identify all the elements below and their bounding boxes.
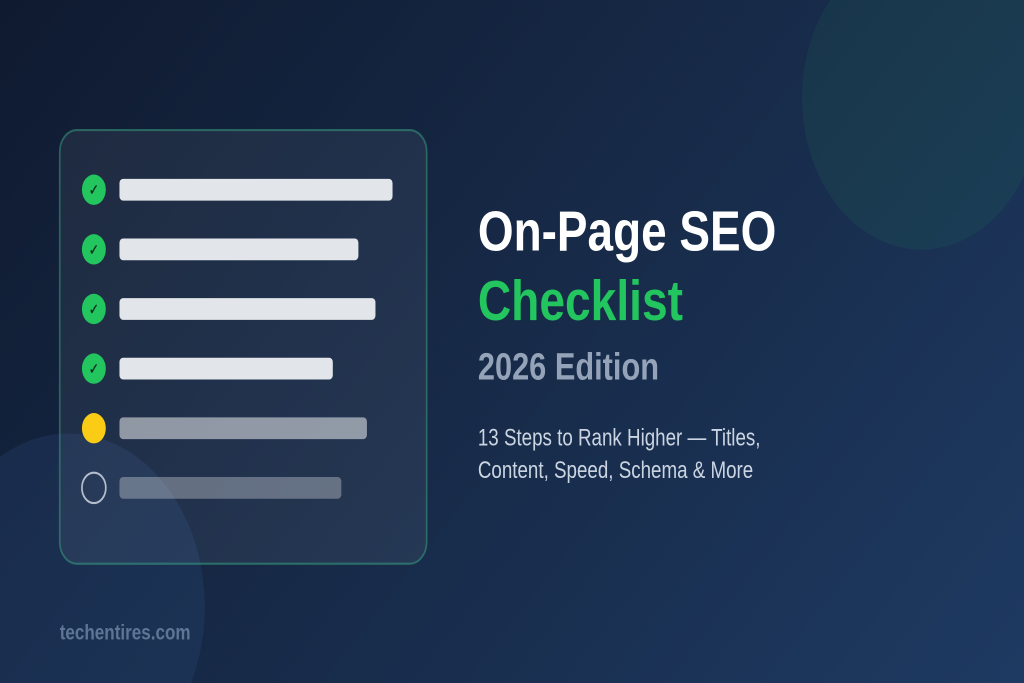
checklist item 1: done	[82, 175, 393, 205]
title: Checklist: Checklist	[478, 268, 683, 332]
checklist item 4: done: ✓	[89, 361, 99, 378]
panel: checklist card	[60, 130, 427, 564]
checklist item 1: done: ✓	[89, 182, 99, 200]
description	[478, 424, 761, 484]
checklist item 4: done	[82, 353, 333, 384]
description: 13 Steps to Rank Higher — Titles,	[478, 424, 761, 451]
checklist item 5: in progress	[82, 413, 367, 443]
checklist item 3: done	[82, 294, 375, 324]
checklist item 2: done	[82, 234, 358, 265]
description: Content, Speed, Schema & More	[478, 457, 753, 484]
title: On-Page SEO: On-Page SEO	[478, 199, 776, 262]
checklist item 3: done: ✓	[89, 301, 99, 319]
decorative circle: bottom left	[0, 434, 205, 683]
subtitle: edition: 2026 Edition	[478, 346, 659, 388]
checklist item 6: to do	[82, 473, 341, 503]
checklist item 2: done: ✓	[89, 241, 99, 259]
decorative circle: top right	[802, 0, 1024, 250]
website credit: techentires.com	[60, 621, 191, 645]
